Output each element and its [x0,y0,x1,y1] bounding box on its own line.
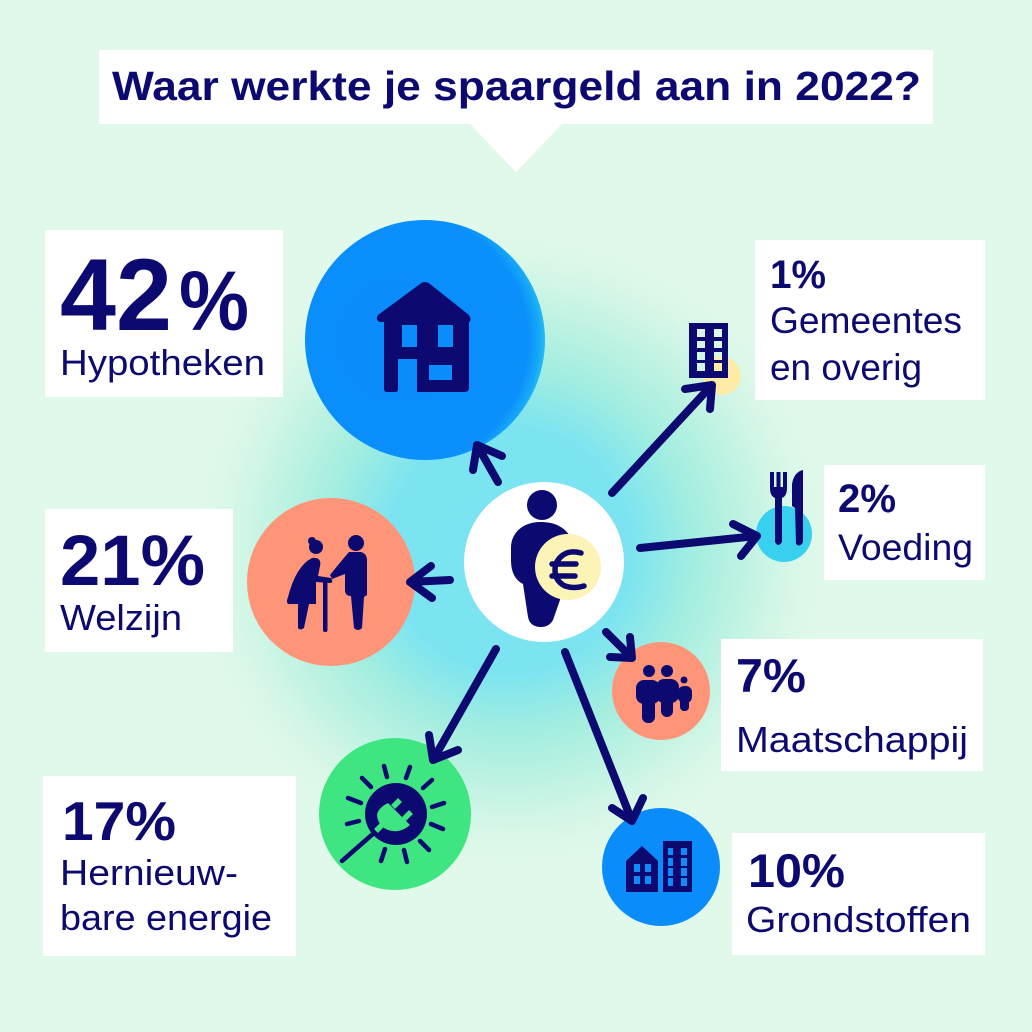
arrow: to Voeding [640,524,757,556]
panel: Grondstoffen 10%: 10% [748,844,845,897]
arrow: to Hypotheken [473,445,502,482]
icon: buildings [602,808,720,926]
panel: Hypotheken 42% [45,230,283,397]
icon: plug with sun rays [319,738,471,890]
panel: Voeding 2%: 2% [838,477,896,521]
panel: Hernieuwbare energie 17% [43,776,296,956]
panel: Hernieuwbare energie 17%: 17% [62,790,176,852]
panel: Voeding 2%: Voeding [838,527,973,568]
panel: Grondstoffen 10% [732,833,985,955]
icon: person with euro coin [464,482,624,642]
title: Waar werkte je spaargeld aan in 2022? [112,63,921,109]
icon: elderly couple [247,498,415,666]
panel: Welzijn 21% [45,509,233,652]
icon: family [612,642,710,740]
panel: Hernieuwbare energie 17%: Hernieuw- [60,852,238,893]
panel: Grondstoffen 10%: Grondstoffen [746,899,971,940]
panel: Welzijn 21%: Welzijn [60,597,182,638]
panel: Welzijn 21%: 21% [60,522,205,601]
icon: cutlery [756,470,812,562]
panel: Hernieuwbare energie 17%: bare energie [60,897,272,938]
panel: Voeding 2% [824,465,985,580]
panel: Gemeentes en overig 1%: Gemeentes [770,300,962,341]
arrow: to Grondstoffen [565,652,643,821]
icon: house in large blue circle [305,220,545,460]
panel: Maatschappij 7%: Maatschappij [736,719,968,760]
panel: Gemeentes en overig 1% [755,240,985,400]
panel: Gemeentes en overig 1%: en overig [770,347,922,388]
arrow: to Gemeentes [612,385,712,493]
arrow: to Hernieuwbare energie [429,649,496,760]
panel: Maatschappij 7%: 7% [736,649,806,702]
panel: Hypotheken 42%: % [179,254,249,348]
arrow: to Maatschappij [606,632,632,658]
panel: Gemeentes en overig 1%: 1% [770,253,826,297]
icon: apartment building [689,323,741,395]
panel: Maatschappij 7% [721,639,983,771]
panel: Hypotheken 42%: Hypotheken [60,342,265,383]
panel: Hypotheken 42%: 42 [60,238,172,352]
arrow: to Welzijn [410,566,450,598]
title [99,50,933,172]
